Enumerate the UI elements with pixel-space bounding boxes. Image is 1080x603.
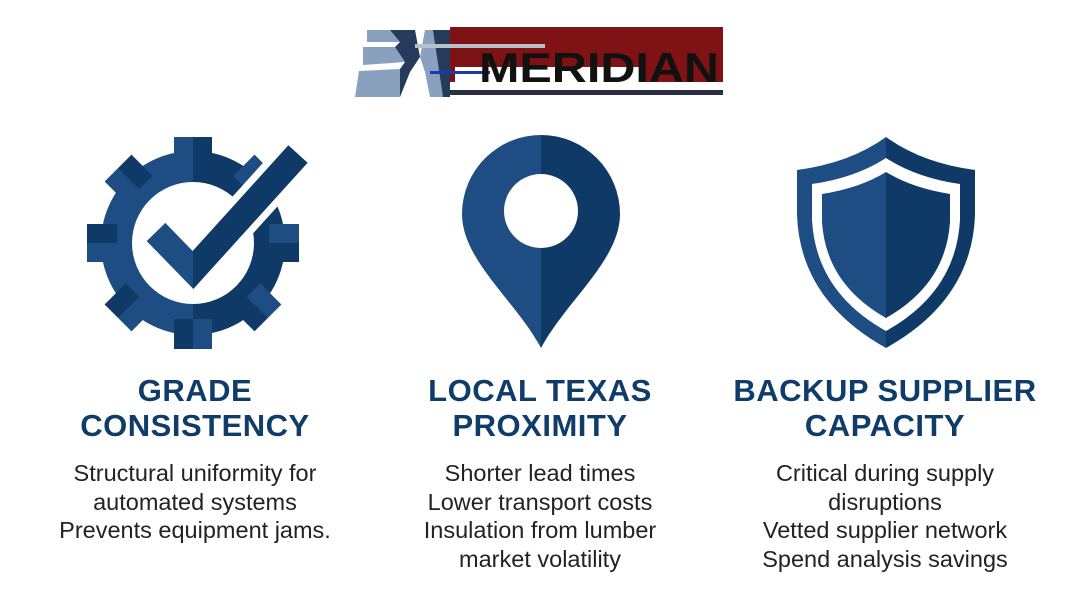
- text: grade consistency: Structural uniformity for: [74, 460, 316, 486]
- heading: backup supplier capacity: BACKUP SUPPLIER: [733, 373, 1037, 408]
- text: grade consistency: automated systems: [93, 488, 297, 514]
- heading: grade consistency: CONSISTENCY: [80, 408, 310, 443]
- icon: gear with check: [87, 137, 308, 349]
- heading: grade consistency: GRADE: [138, 373, 252, 408]
- text: local texas proximity: Shorter lead times: [445, 460, 635, 486]
- text: backup supplier capacity: disruptions: [828, 488, 942, 514]
- logo: [355, 27, 723, 97]
- text: local texas proximity: Insulation from lumber: [424, 517, 656, 543]
- heading: local texas proximity: LOCAL TEXAS: [428, 373, 652, 408]
- heading: local texas proximity: PROXIMITY: [452, 408, 628, 443]
- text: local texas proximity: [424, 460, 656, 572]
- text: backup supplier capacity: Critical during supply: [776, 460, 994, 486]
- text: backup supplier capacity: [762, 460, 1008, 572]
- icon: location pin: [462, 135, 620, 348]
- text: local texas proximity: market volatility: [459, 546, 621, 572]
- heading: local texas proximity: [428, 373, 652, 443]
- text: local texas proximity: Lower transport costs: [428, 488, 652, 514]
- text: grade consistency: [59, 460, 331, 543]
- heading: grade consistency: [80, 373, 310, 443]
- icon: shield: [797, 137, 975, 348]
- text: backup supplier capacity: Vetted supplier network: [763, 517, 1007, 543]
- text: backup supplier capacity: Spend analysis savings: [762, 546, 1008, 572]
- text: grade consistency: Prevents equipment jams.: [59, 517, 331, 543]
- logo text: MERIDIAN: [479, 44, 719, 91]
- heading: backup supplier capacity: CAPACITY: [805, 408, 965, 443]
- heading: backup supplier capacity: [733, 373, 1037, 443]
